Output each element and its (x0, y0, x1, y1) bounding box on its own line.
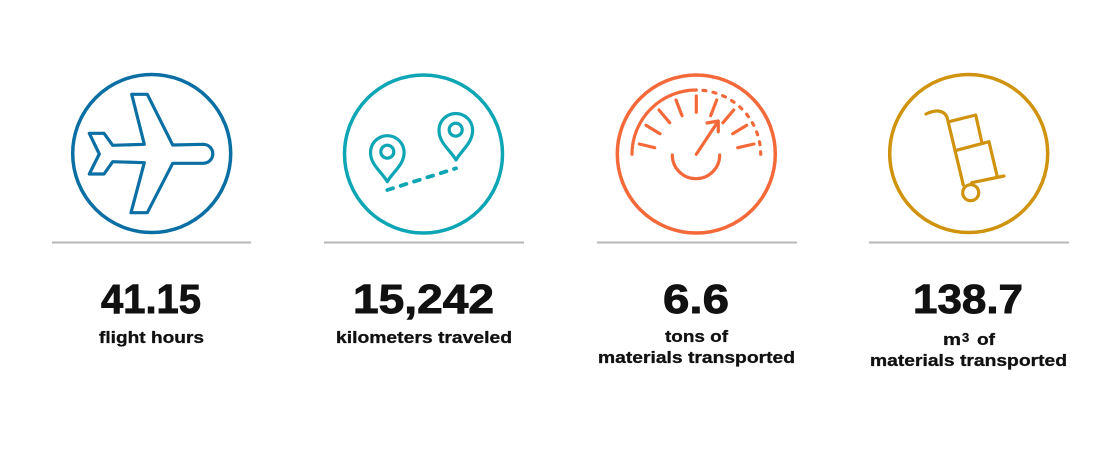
label: tons of materials transported: tons of (665, 328, 729, 346)
label: tons of materials transported: materials transported (598, 349, 795, 367)
stat: 138.7: 138.7 (913, 276, 1023, 322)
icon: speedometer gauge (617, 75, 775, 233)
panel: tons transported (597, 75, 797, 367)
label: kilometers traveled: kilometers traveled (336, 329, 512, 347)
panel: flight hours (52, 74, 251, 347)
panel: kilometers traveled (324, 75, 524, 347)
icon: airplane (73, 74, 231, 232)
label: cubic meters of materials transported: m (943, 331, 961, 349)
stat: 41.15: 41.15 (101, 276, 201, 322)
panel: cubic meters transported (869, 74, 1069, 370)
label: cubic meters of materials transported (870, 330, 1067, 370)
icon: hand truck with boxes (890, 74, 1048, 232)
label: cubic meters of materials transported: materials transported (870, 352, 1067, 370)
icon: map pins with dashed route (344, 75, 502, 233)
label: cubic meters of materials transported: of (977, 331, 996, 349)
label: flight hours: flight hours (99, 329, 204, 347)
label: cubic meters of materials transported: 3 (962, 330, 969, 345)
stat: 6.6: 6.6 (663, 276, 729, 322)
label: tons of materials transported (598, 328, 795, 367)
stat: 15,242: 15,242 (353, 276, 494, 322)
